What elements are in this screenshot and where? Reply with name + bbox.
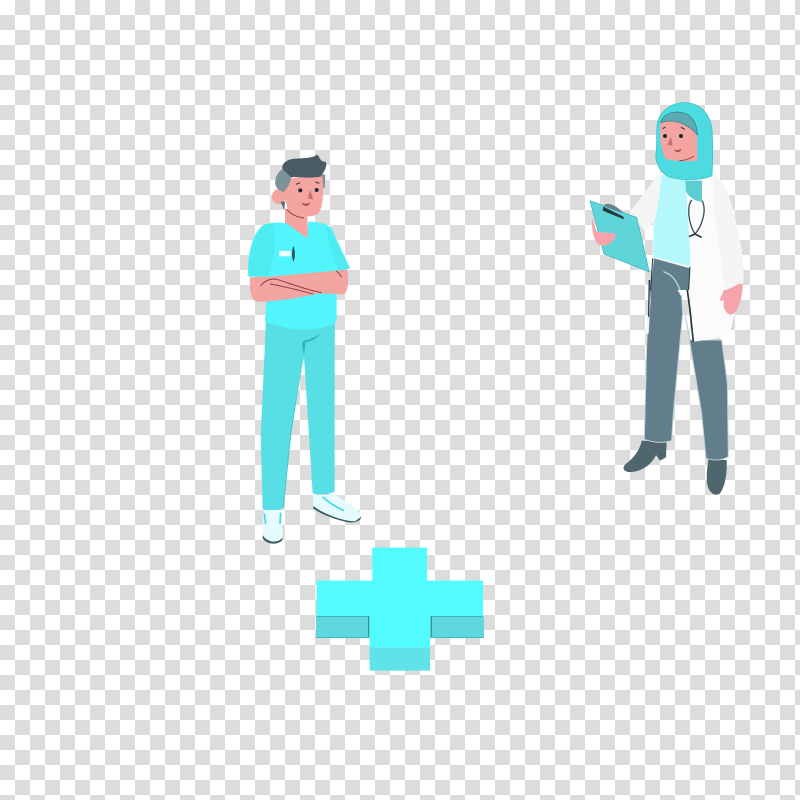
shoes: [263, 493, 361, 544]
arm side shading: [316, 616, 484, 638]
eyes nose mouth: [298, 188, 302, 192]
right side of head: [320, 173, 325, 188]
figure: male nurse: [248, 155, 361, 544]
torso and head: [248, 155, 350, 330]
clipboard: [590, 201, 649, 272]
hair: [275, 155, 326, 192]
icon: medical cross: [316, 548, 484, 671]
coat hem: [688, 280, 743, 342]
face: [283, 173, 323, 216]
eyes nose mouth: [663, 134, 667, 138]
figure: female doctor: [590, 103, 744, 495]
coat: [630, 172, 744, 290]
stethoscope: [689, 200, 704, 234]
neck: [285, 208, 308, 238]
shirt: [248, 222, 350, 330]
hijab: [656, 103, 713, 180]
ear: [272, 189, 285, 204]
lapel: [686, 173, 725, 290]
cross face: [317, 548, 483, 648]
trousers: [261, 320, 361, 544]
boots: [623, 441, 727, 495]
legs and boots: [623, 280, 743, 495]
vertical front shading: [370, 648, 430, 671]
badge: [279, 251, 291, 256]
hand: [719, 282, 743, 315]
trousers: [644, 280, 683, 442]
face: [660, 121, 697, 161]
hand holding clipboard: [592, 218, 616, 246]
crossed arms: [250, 269, 348, 302]
undershirt: [653, 175, 692, 267]
upper body: [590, 103, 744, 290]
